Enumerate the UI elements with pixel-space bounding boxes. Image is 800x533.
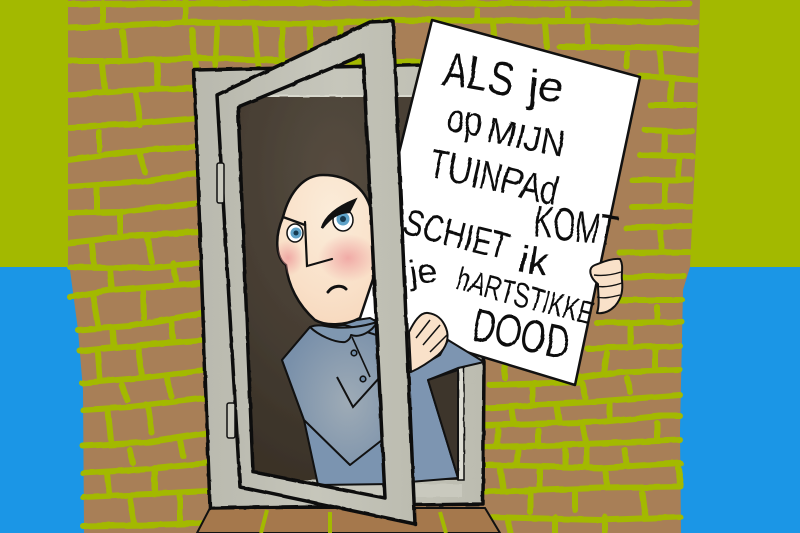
right eye <box>333 209 353 231</box>
body <box>282 318 392 485</box>
person <box>272 175 484 485</box>
sign lettering: je <box>406 252 439 293</box>
sign lettering: DOOD <box>468 298 575 369</box>
white sign <box>357 20 640 385</box>
left eye <box>287 224 303 242</box>
hinge lower <box>227 403 235 438</box>
open window casement <box>217 21 415 524</box>
sign lettering: KOMT <box>531 196 621 257</box>
background: olive top band <box>0 0 800 267</box>
dark gap under the arm <box>428 370 458 478</box>
sign lettering: je <box>524 61 566 113</box>
sign lettering: SCHIET <box>400 202 513 268</box>
nose <box>305 222 332 266</box>
mouth <box>328 286 346 292</box>
far arm reaching to the sign <box>385 340 484 484</box>
background: blue bottom band <box>0 267 800 533</box>
right hand <box>590 259 622 313</box>
sign lettering: ALS <box>438 43 518 107</box>
sleeve fold <box>337 377 380 407</box>
hinge upper <box>217 163 224 203</box>
head <box>277 175 376 324</box>
sign lettering: hARTSTIKKE <box>453 260 598 332</box>
brick wall <box>68 0 700 533</box>
sign lettering <box>400 43 621 369</box>
collar <box>310 322 377 342</box>
sill <box>320 484 462 497</box>
cheeks <box>278 238 372 278</box>
placket and buttons <box>351 337 370 382</box>
floor / ledge below the window <box>197 508 500 533</box>
left hand <box>409 313 448 372</box>
fixed window frame <box>194 65 484 508</box>
lower right frame strip <box>458 368 464 480</box>
sign lettering: MIJN <box>484 110 569 165</box>
sleeve <box>282 325 392 465</box>
dark interior <box>232 97 460 480</box>
sign lettering: TUINPAd <box>425 142 563 214</box>
sign lettering: op <box>443 96 487 145</box>
eyebrows <box>283 200 355 228</box>
sign lettering: ik <box>516 237 553 285</box>
